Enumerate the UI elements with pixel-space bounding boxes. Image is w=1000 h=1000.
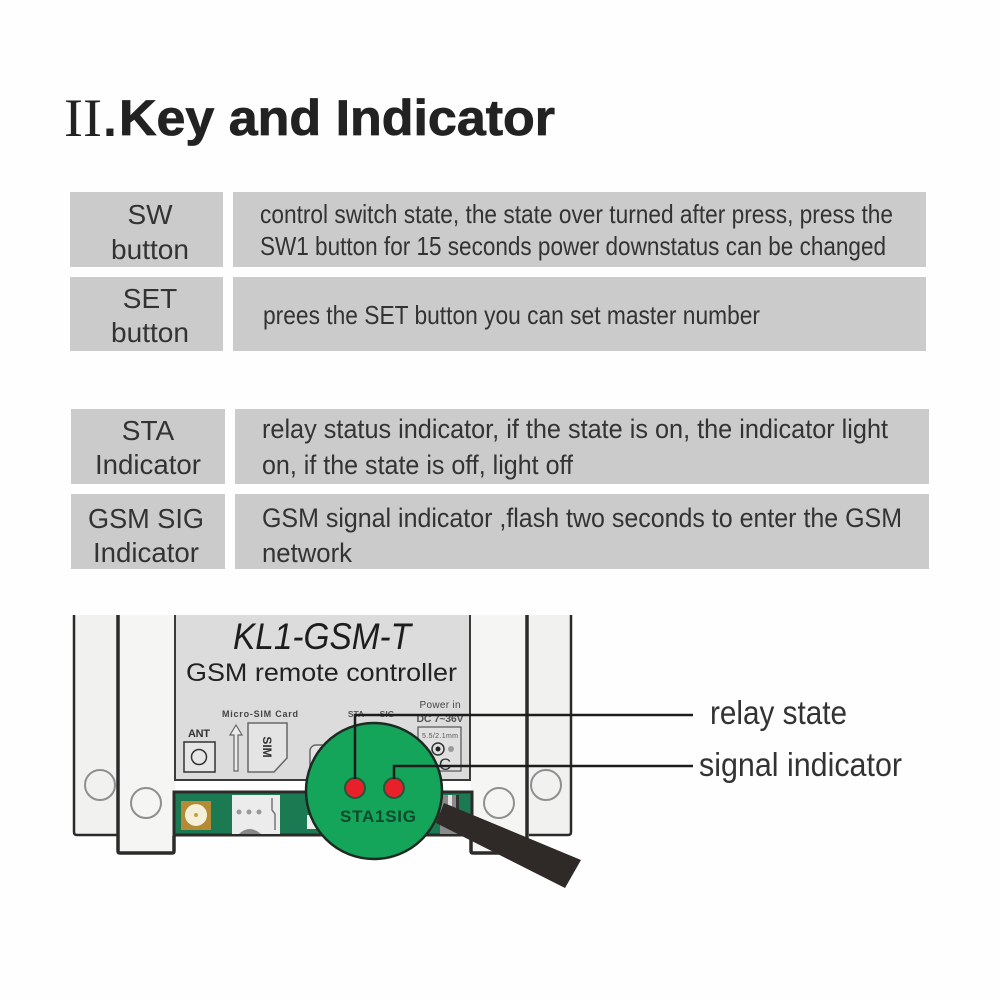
panel: STA Indicator row: relay status indicator, if the state is on, the indicator light [262, 414, 888, 444]
panel: SW button row: button [111, 234, 189, 265]
indicator labels on plate: SIG [380, 709, 395, 719]
title: Key and Indicator [119, 90, 555, 146]
panel: GSM SIG Indicator row: GSM SIG [88, 503, 204, 534]
SIM card outline [248, 723, 287, 772]
magnifier handle [436, 803, 581, 888]
panel: SW button row [70, 192, 926, 267]
indicator labels on plate [348, 709, 395, 719]
inner left plate [119, 615, 175, 853]
power input label: C [439, 755, 451, 774]
outer right plate [527, 615, 571, 835]
callout: signal indicator: signal indicator [699, 746, 902, 783]
callout: relay state: relay state [710, 694, 847, 731]
panel: STA Indicator row: Indicator [95, 449, 201, 480]
power socket [440, 795, 459, 834]
panel: GSM SIG Indicator row: Indicator [93, 537, 199, 568]
power input label: Power in [420, 700, 460, 711]
power input label [416, 700, 464, 774]
panel: SET button row: SET [123, 283, 177, 314]
small board connector [307, 815, 321, 829]
antenna port label [184, 728, 215, 772]
label plate [175, 615, 470, 780]
outer left plate [74, 615, 119, 835]
panel: SET button row: button [111, 317, 189, 348]
panel: SET button row: prees the SET button you can set master number [263, 300, 760, 330]
panel: STA Indicator row [71, 409, 929, 484]
panel: GSM SIG Indicator row: network [262, 538, 352, 568]
lens LED labels: STA1SIG [340, 807, 416, 826]
antenna port label: ANT [188, 728, 210, 740]
mounting holes [85, 770, 561, 818]
panel: SW button row: control switch state, the state over turned after press, press the [260, 199, 893, 229]
micro SIM label: Micro-SIM Card [222, 709, 298, 719]
STA red LED [345, 778, 365, 798]
panel: STA Indicator row: STA [122, 415, 175, 446]
panel: SET button row [70, 277, 926, 351]
magnifier lens [306, 723, 442, 859]
leader line: relay state [355, 715, 693, 779]
model name: KL1-GSM-T [233, 616, 413, 657]
SIM insert arrow [230, 725, 242, 771]
power input label: DC 7~36V [416, 713, 464, 725]
panel: SW button row: SW [127, 199, 173, 230]
SIG red LED [384, 778, 404, 798]
device illustration [74, 615, 581, 888]
panel: SW button row: SW1 button for 15 seconds power downstatus can be changed [260, 231, 886, 261]
gold antenna connector [181, 801, 211, 830]
inner right plate [471, 615, 527, 853]
product description: GSM remote controller [186, 659, 457, 687]
title: II [64, 88, 102, 148]
power input label: 5.5/2.1mm [422, 733, 458, 740]
rounded socket outline behind lens [310, 745, 340, 775]
panel: GSM SIG Indicator row: GSM signal indicator ,flash two seconds to enter the GSM [262, 503, 902, 533]
panel: GSM SIG Indicator row [71, 494, 929, 569]
plate outlines [74, 615, 571, 853]
title: . [103, 91, 117, 147]
SIM slot [232, 795, 280, 834]
SIM card outline: SIM [260, 736, 274, 758]
leader line: signal indicator [394, 766, 693, 779]
indicator labels on plate: STA [348, 709, 364, 719]
panel: STA Indicator row: on, if the state is off, light off [262, 450, 573, 480]
green circuit board [174, 792, 472, 835]
